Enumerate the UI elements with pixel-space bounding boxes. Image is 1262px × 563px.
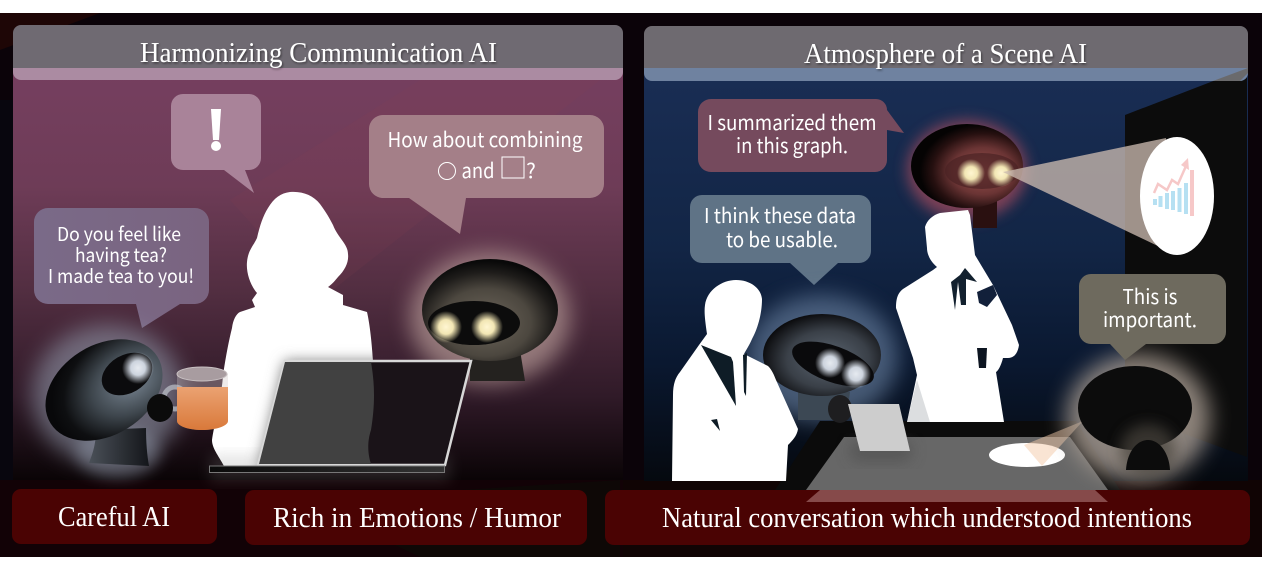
label: rich in emotions / humor — [245, 490, 587, 545]
speech bubble: how about combining — [369, 115, 604, 234]
projection wall — [1125, 68, 1247, 457]
label: natural conversation: Natural conversation which understood intentions — [662, 503, 1192, 534]
label: careful AI: Careful AI — [58, 502, 170, 533]
speech bubble: how about combining: ? — [526, 154, 536, 184]
speech bubble: important: This is — [1122, 280, 1178, 310]
speech bubble: important — [1079, 274, 1226, 360]
speech bubble: summarized: I summarized them — [708, 106, 876, 136]
header: atmosphere of a scene AI — [644, 26, 1248, 81]
robot: attentive with blue glow — [746, 295, 898, 421]
header: atmosphere of a scene AI: Atmosphere of a Scene AI — [804, 38, 1087, 70]
header: harmonizing communication AI — [13, 25, 623, 80]
label: natural conversation — [605, 490, 1250, 545]
robot: thinking, behind laptop — [410, 252, 570, 384]
tablet — [848, 404, 912, 462]
man with folded arms — [672, 280, 798, 481]
speech bubble: how about combining: How about combining — [388, 123, 583, 153]
laptop — [210, 361, 471, 481]
label: rich in emotions / humor: Rich in Emotions / Humor — [273, 503, 562, 534]
man with hand on chin — [896, 210, 1019, 422]
speech bubble: usable data — [690, 195, 871, 285]
speech bubble: summarized: in this graph. — [736, 129, 848, 159]
robot hand near tablet — [828, 395, 852, 423]
speech bubble: usable data: to be usable. — [726, 223, 838, 253]
speech bubble: tea: having tea? — [75, 241, 167, 268]
robot: projecting a graph — [907, 120, 1027, 228]
panel: harmonizing communication AI — [13, 25, 623, 481]
chart bars — [1153, 183, 1188, 214]
speech bubble: tea — [34, 208, 209, 328]
speech bubble: summarized — [698, 99, 904, 172]
robot: careful, with glow — [27, 318, 184, 478]
woman silhouette — [212, 192, 373, 466]
speech bubble: how about combining: and — [462, 154, 494, 184]
robot hand — [147, 394, 173, 422]
projector beam and screen with chart — [1003, 137, 1214, 255]
speech bubble: usable data: I think these data — [704, 199, 856, 229]
panel: atmosphere of a scene AI — [644, 26, 1248, 490]
table — [775, 421, 1120, 490]
speech bubble: important: important. — [1103, 303, 1197, 333]
label: careful AI — [12, 489, 217, 544]
speech bubble: tea: I made tea to you! — [48, 262, 194, 289]
header: harmonizing communication AI: Harmonizing Communication AI — [140, 37, 497, 69]
speech bubble: exclamation — [171, 94, 261, 193]
robot: dark with beige glow — [1066, 354, 1210, 482]
mug of tea — [164, 367, 228, 430]
plate with spotlight — [989, 421, 1083, 467]
speech bubble: tea: Do you feel like — [57, 220, 181, 247]
